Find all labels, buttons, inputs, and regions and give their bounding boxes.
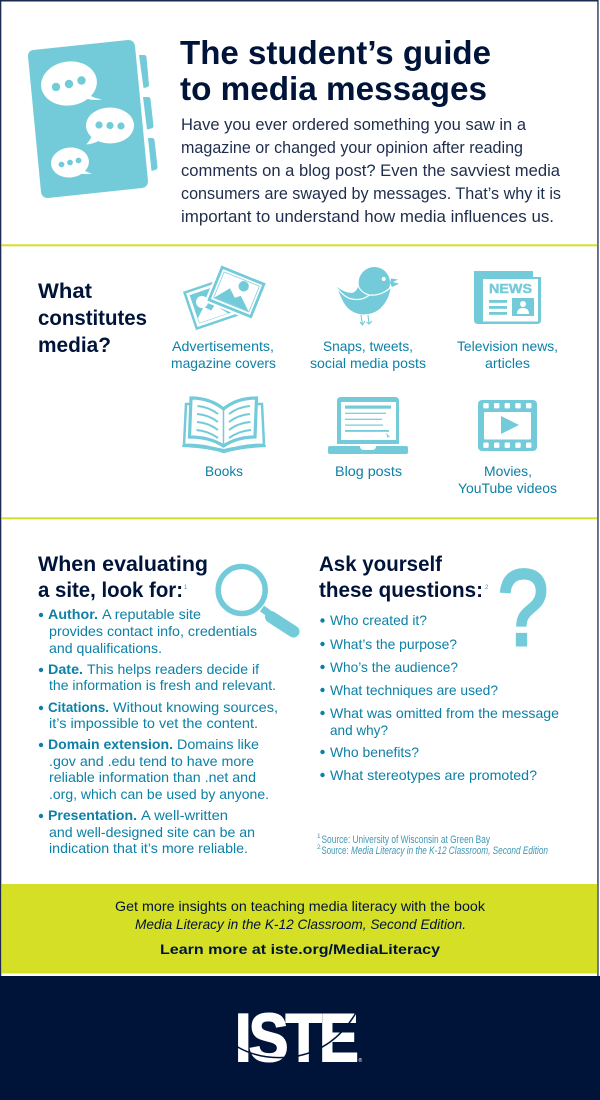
item: presentation: Presentation. [48,807,137,823]
heading: what constitutes media: What [38,279,92,303]
caption: blog posts: Blog posts [335,463,402,479]
item: author: A reputable site [102,606,201,622]
item: citations: it’s impossible to vet the content. [49,715,258,731]
caption: snaps, tweets: Snaps, tweets, [323,338,413,354]
footnotes: 1 [317,833,321,840]
item: presentation: indication that it’s more reliable. [49,840,248,856]
item: author: provides contact info, credentials [49,623,257,639]
icon: question mark: ? [498,548,549,669]
item: author: and qualifications. [49,640,162,656]
heading: ask yourself these questions: 2 [485,585,489,591]
list: questions: What was omitted from the message [330,705,559,721]
item: presentation: A well-written [141,807,228,823]
caption: advertisements: magazine covers [171,355,276,371]
item: presentation [39,807,255,856]
caption: books: Books [205,463,243,479]
item: author: Author. [48,606,98,622]
list: questions: What stereotypes are promoted? [330,767,537,783]
list: questions: Who created it? [330,612,427,628]
footnotes: 2 [317,844,321,851]
intro paragraph: important to understand how media influences us. [181,207,554,226]
call to action band [1,884,597,974]
list: questions: Who benefits? [330,744,419,760]
call to action band: Media Literacy in the K-12 Classroom, Second Edition. [135,916,466,932]
intro paragraph: comments on a blog post? Even the savviest media [181,161,561,180]
item: citations: Citations. [48,699,109,715]
heading: when evaluating a site: When evaluating [38,552,208,576]
caption: movies: Movies, [484,463,532,479]
heading: what constitutes media: constitutes [38,306,147,330]
item: presentation: and well-designed site can be an [49,824,255,840]
heading: ask yourself these questions: Ask yourself [319,552,443,576]
icon: newspaper: NEWS [489,282,532,296]
item: domain extension: reliable information than .net and [49,769,256,785]
heading: when evaluating a site [38,552,208,602]
caption: advertisements: Advertisements, [172,338,274,354]
heading: what constitutes media: media? [38,333,111,357]
heading: when evaluating a site: a site, look for: [38,578,183,602]
heading: what constitutes media [38,279,147,357]
list: questions: and why? [330,722,388,738]
title: to media messages [180,70,487,107]
caption: movies: YouTube videos [458,480,557,496]
item: domain extension: .org, which can be used by anyone. [49,786,269,802]
item: domain extension: Domains like [177,736,259,752]
footnotes: Source: [322,845,348,857]
icon: newspaper [474,271,541,324]
item: date: This helps readers decide if [87,661,259,677]
call to action band: Get more insights on teaching media literacy with the book [115,898,486,914]
intro paragraph: Have you ever ordered something you saw in a [181,115,527,134]
list: evaluation criteria [39,606,278,856]
caption: television news: articles [485,355,530,371]
call to action band: Learn more at iste.org/MediaLiteracy [160,941,440,957]
item: date: the information is fresh and relevant. [49,677,276,693]
item: citations: Without knowing sources, [113,699,278,715]
caption: television news [457,338,558,371]
heading: ask yourself these questions: these questions: [319,578,483,602]
footnotes [317,833,548,857]
list: questions: What techniques are used? [330,682,498,698]
icon: notebook with speech bubbles [28,40,158,198]
intro paragraph: consumers are swayed by messages. That’s why it is [181,184,561,203]
list: questions: Who’s the audience? [330,659,458,675]
item: domain extension [39,736,269,802]
caption: advertisements [171,338,276,371]
item: domain extension: Domain extension. [48,736,173,752]
caption: snaps, tweets [310,338,426,371]
item: date [39,661,276,693]
icon: magnifying glass [218,566,294,632]
icon: photos [185,263,268,329]
icon: film strip with play button [478,400,537,451]
item: citations [39,699,278,731]
heading: when evaluating a site: 1 [184,585,188,591]
icon: laptop [328,397,408,454]
title [180,34,491,107]
ISTE logo: ISTE [235,999,357,1076]
heading: ask yourself these questions [319,552,489,602]
caption: movies [458,463,557,496]
ISTE logo: ® [358,1057,362,1064]
caption: snaps, tweets: social media posts [310,355,426,371]
title: The student’s guide [180,34,491,71]
item: domain extension: .gov and .edu tend to have more [49,753,254,769]
icon: bird [337,267,399,325]
intro paragraph: magazine or changed your opinion after reading [181,138,523,157]
list: questions: What’s the purpose? [330,636,457,652]
list: questions [320,612,559,783]
icon: open book [182,398,266,453]
item: date: Date. [48,661,83,677]
footer band [0,976,600,1100]
footnotes: Source: University of Wisconsin at Green Bay [322,834,490,846]
item: author [39,606,257,656]
intro paragraph [181,115,561,226]
caption: television news: Television news, [457,338,558,354]
